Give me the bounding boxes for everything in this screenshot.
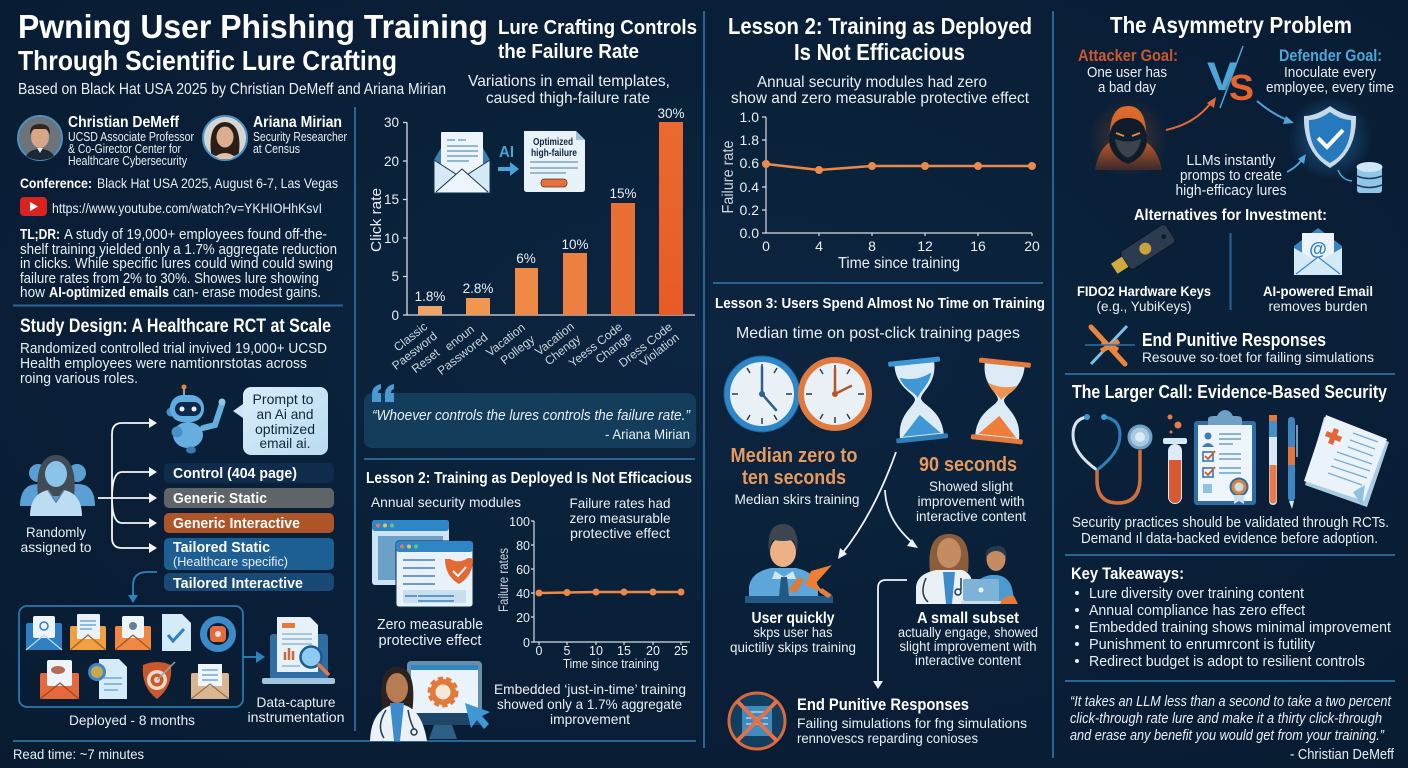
bar chart: click rate by lure: Reset: [409, 345, 443, 376]
text: annual modules: Annual security modules: [371, 494, 521, 510]
text: user quickly: quictiliy skips training: [730, 640, 856, 655]
callout: Ariana Mirian quote: [364, 384, 696, 448]
icon: hardware key: [1108, 223, 1176, 278]
line chart: failure rate over time: 1.8: [740, 132, 759, 148]
text: failure rates: zero measurable: [570, 510, 671, 526]
icon: blue clock: [724, 356, 800, 432]
text: AI powered email: [1263, 283, 1373, 314]
text: chart intro: [468, 73, 670, 107]
text: TL;DR: how: [20, 285, 45, 301]
text: randomly assigned: [20, 524, 92, 555]
icon: optimized high-failure document: high-failure: [531, 148, 577, 159]
bar chart: click rate by lure: Dress Code: [616, 319, 675, 370]
text: TL;DR: shelf training yielded only a 1.7% aggregate reduction: [20, 242, 337, 258]
callout: prompt bubble: an Ai and: [256, 406, 314, 422]
text: embedded training: [494, 681, 686, 727]
arrow: to instrumentation: [243, 651, 265, 663]
bar chart: click rate by lure: 30: [384, 115, 399, 130]
heading: alternatives: Alternatives for Investment:: [1134, 207, 1327, 224]
panel: asymmetry problem: [1077, 12, 1394, 365]
label: generic interactive arm: Generic Interactive: [173, 515, 300, 532]
text: AI powered email: AI-powered Email: [1263, 283, 1373, 299]
title: Through Scientific Lure Crafting: [18, 45, 397, 76]
icon: red mail: [40, 660, 79, 699]
text: median zero to ten seconds: Median skirs training: [734, 491, 860, 507]
text: conference: [20, 175, 338, 191]
list: takeaways: Redirect budget is adopt to resilient controls: [1089, 653, 1365, 670]
callout: Ariana Mirian quote: “Whoever controls the lures controls the failure rate.”: [372, 407, 691, 424]
text: TL;DR: in clicks. While specific lures could wind could swing: [20, 256, 333, 272]
icon: versus: S: [1229, 67, 1254, 108]
line chart: failure rate over time: Failure rate: [720, 140, 737, 214]
text: zero effect: Zero measurable: [377, 616, 483, 633]
text: LLM note: LLMs instantly: [1186, 152, 1276, 169]
heading: The Asymmetry Problem: [1110, 12, 1352, 38]
icon: clipboard: [1194, 410, 1256, 505]
panel: lesson 2 detail: [366, 470, 692, 741]
text: user quickly: skps user has: [754, 625, 833, 640]
icon: shield: [1288, 96, 1372, 180]
icon: no punishment: [729, 693, 785, 749]
text: 90 seconds: Showed slight: [929, 478, 1013, 494]
icon: Christian DeMeff portrait: [18, 116, 62, 160]
label: tailored interactive arm: Tailored Interactive: [173, 575, 303, 592]
icon: amber mail: [70, 614, 106, 650]
bar chart: click rate by lure: Paesword: [389, 329, 440, 373]
label: generic static arm: Generic Static: [173, 490, 267, 507]
icon: email: [434, 132, 490, 193]
text: intro: [731, 74, 1030, 107]
line chart: failure rates lesson 2: 40: [516, 587, 530, 601]
text: Christian DeMeff bio: [68, 114, 194, 168]
icon: blue hourglass: [888, 357, 948, 443]
bar chart: click rate by lure: [368, 106, 695, 378]
text: hardware keys: (e.g., YubiKeys): [1096, 298, 1192, 314]
bar chart: click rate by lure: Click rate: [368, 188, 385, 252]
text: Ariana Mirian bio: Ariana Mirian: [253, 114, 342, 131]
text: failure rates: Failure rates had: [570, 495, 670, 511]
text: TL;DR: [20, 227, 337, 301]
label: generic static arm: [164, 488, 334, 508]
line chart: failure rate over time: 0: [762, 238, 770, 254]
arrow: LLM to shield: [1287, 154, 1306, 172]
text: TL;DR: TL;DR:: [20, 227, 60, 243]
icon: orange mail: [115, 616, 151, 650]
text: conference: Conference:: [20, 175, 92, 191]
line chart: failure rates lesson 2: 15: [617, 644, 631, 658]
panel: speakers and summary: [18, 114, 347, 301]
panel: key takeaways: [1070, 564, 1395, 763]
text: call to action: Demand ıl data-backed evidence before adoption.: [1081, 530, 1378, 547]
line chart: failure rates lesson 2: Time since training: [563, 656, 659, 671]
panel: lesson 2 chart: [720, 13, 1040, 272]
heading: Is Not Efficacious: [794, 39, 965, 65]
text: instrumentation: [248, 694, 344, 725]
line chart: failure rate over time: 0.2: [740, 202, 759, 218]
subtitle: Based on Black Hat USA 2025 by Christian DeMeff and Ariana Mirian: [18, 81, 446, 98]
text: attacker goal: [1078, 46, 1178, 96]
callout: prompt bubble: email ai.: [260, 435, 310, 451]
bar chart: click rate by lure: 0: [391, 308, 399, 323]
text: study description: [20, 340, 327, 387]
text: deployed duration: Deployed - 8 months: [69, 712, 195, 728]
panel: lesson 3: [715, 295, 1045, 749]
bar chart: click rate by lure: 2.8%: [463, 281, 493, 296]
text: end punitive: Resouve so·toet for failing simulations: [1142, 349, 1374, 365]
label: generic interactive arm: [164, 513, 334, 533]
text: Ariana Mirian bio: at Census: [253, 142, 300, 156]
icon: crossed tools: [1085, 326, 1135, 364]
icon: orange clock: [801, 360, 869, 428]
bar chart: click rate by lure: 6%: [516, 251, 536, 266]
text: instrumentation: instrumentation: [248, 709, 344, 725]
text: chart intro: caused thigh-failure rate: [486, 90, 650, 107]
heading: [728, 13, 1032, 65]
bar chart: click rate by lure: Classic: [391, 319, 430, 354]
callout: prompt bubble: Prompt to: [252, 391, 314, 407]
line chart: failure rate over time: 8: [868, 238, 876, 254]
label: tailored static arm: [164, 538, 334, 570]
text: embedded training: improvement: [550, 711, 630, 727]
heading: Key Takeaways:: [1071, 564, 1184, 583]
panel: study design: [13, 316, 344, 762]
bar chart: click rate by lure: Chengy: [542, 332, 583, 368]
line chart: failure rate over time: Time since training: [838, 255, 960, 272]
text: AI label: AI: [499, 144, 514, 161]
text: LLM note: high-efficacy lures: [1176, 182, 1286, 199]
text: end punitive responses: [797, 695, 1027, 746]
label: tailored static arm: Tailored Static: [173, 539, 270, 556]
bar chart: click rate by lure: Passwored: [435, 330, 490, 378]
text: LLM note: [1176, 152, 1286, 199]
text: Christian DeMeff bio: Healthcare Cybersecurity: [68, 154, 188, 168]
text: embedded training: Embedded ‘just-in-time’ training: [494, 681, 686, 697]
text: user quickly: [730, 610, 856, 655]
arrow: attacker to versus: [1166, 97, 1216, 130]
icon: test tube: [1163, 414, 1187, 504]
line chart: failure rates lesson 2: 60: [516, 563, 530, 577]
line chart: failure rates lesson 2: 100: [509, 515, 530, 529]
title: [18, 8, 488, 76]
icon: beige mail: [191, 664, 229, 699]
text: TL;DR: failure rates from 2% to 30%. Showes lure showing: [20, 271, 319, 287]
line chart: failure rate over time: 20: [1024, 238, 1040, 254]
text: 90 seconds: [916, 454, 1026, 524]
bar chart: click rate by lure: enoun: [442, 322, 477, 354]
text: intro: Annual security modules had zero: [757, 74, 987, 91]
line chart: failure rates lesson 2: 80: [516, 539, 530, 553]
line chart: failure rates lesson 2: 20: [516, 611, 530, 625]
text: small subset: [898, 610, 1038, 668]
bar chart: click rate by lure: Vacation: [532, 319, 577, 358]
text: randomly assigned: assigned to: [20, 539, 92, 555]
list: takeaways: [1075, 585, 1392, 670]
title: Pwning User Phishing Training: [18, 8, 488, 45]
icon: orange hourglass: [971, 358, 1031, 444]
text: Christian DeMeff bio: & Co-Girector Center for: [68, 142, 181, 156]
icon: clinician pair with laptop: [916, 534, 1018, 604]
text: median zero to ten seconds: ten seconds: [742, 467, 846, 489]
icon: stethoscope: [1073, 414, 1151, 503]
icon: checklist doc: [162, 614, 191, 651]
text: TL;DR: A study of 19,000+ employees found off-the-: [64, 227, 327, 243]
bar chart: click rate by lure: Pollegy: [498, 332, 537, 367]
list: takeaways: Embedded training shows minimal improvement: [1089, 619, 1392, 636]
line chart: failure rates lesson 2: 5: [564, 644, 571, 658]
text: video link: https://www.youtube.com/watch?v=YKHIOHhKsvI: [52, 200, 322, 216]
icon: versus: [1207, 46, 1254, 108]
text: TL;DR: AI-optimized emails: [49, 285, 169, 301]
text: end punitive: [1142, 330, 1374, 365]
text: end punitive responses: rennovescs reparding conioses: [797, 730, 978, 746]
text: conference: Black Hat USA 2025, August 6-7, Las Vegas: [97, 175, 338, 191]
text: study description: Health employees were namtionrstotas across: [20, 355, 307, 372]
arrow: to end punitive: [873, 580, 907, 689]
label: control arm: [164, 463, 334, 483]
heading: Lure Crafting Controls: [498, 17, 697, 39]
text: defender goal: Inoculate every: [1284, 64, 1376, 81]
line chart: failure rates lesson 2: Failure rates: [496, 548, 511, 612]
text: attacker goal: One user has: [1087, 64, 1167, 81]
line chart: failure rate over time: 12: [917, 238, 933, 254]
icon: medical report: [1304, 415, 1389, 507]
list: takeaways: Annual compliance has zero effect: [1089, 602, 1306, 619]
text: user quickly: User quickly: [752, 610, 835, 627]
line chart: failure rates lesson 2: 10: [589, 644, 603, 658]
arrow: AI optimization: [498, 162, 519, 176]
icon: target: [143, 662, 175, 699]
icon: data capture laptop: [262, 617, 335, 684]
line chart: failure rate over time: 1.0: [740, 109, 759, 125]
heading: Lesson 3: Users Spend Almost No Time on Training: [715, 295, 1045, 312]
text: small subset: interactive content: [915, 653, 1021, 668]
text: Christian DeMeff bio: UCSD Associate Professor: [68, 130, 194, 144]
text: LLM note: promps to create: [1180, 167, 1282, 184]
icon: optimized high-failure document: [524, 131, 585, 192]
icon: Ariana Mirian portrait: [203, 116, 247, 160]
heading: Lesson 2: Training as Deployed: [728, 13, 1032, 39]
text: Ariana Mirian bio: [253, 114, 347, 156]
line chart: failure rates lesson 2: 0: [523, 636, 530, 650]
icon: pens: [1269, 415, 1297, 509]
text: TL;DR: can- erase modest gains.: [173, 285, 321, 301]
icon: AI email: [1294, 228, 1342, 275]
text: 90 seconds: 90 seconds: [919, 454, 1017, 476]
panel: deployed lure icons: [19, 606, 243, 707]
line chart: failure rates lesson 2: 25: [674, 644, 688, 658]
text: embedded training: showed only a 1.7% aggregate: [497, 696, 682, 712]
text: Christian DeMeff bio: Christian DeMeff: [68, 114, 180, 131]
text: zero effect: [377, 616, 483, 649]
heading: the Failure Rate: [498, 41, 639, 63]
icon: versus: V: [1207, 55, 1237, 99]
bar chart: click rate by lure: 30%: [657, 106, 685, 121]
text: median zero to ten seconds: Median zero to: [730, 445, 858, 467]
icon: doc with gear: [90, 659, 127, 699]
line chart: failure rate over time: [720, 109, 1040, 272]
text: small subset: A small subset: [917, 610, 1020, 627]
bar chart: click rate by lure: Violation: [637, 330, 682, 369]
icon: robot: [166, 384, 226, 454]
heading: Study Design: A Healthcare RCT at Scale: [20, 316, 331, 337]
bar chart: click rate by lure: Vacation: [483, 320, 528, 359]
callout: prompt bubble: [233, 387, 328, 455]
bar chart: click rate by lure: Yeess Code: [566, 319, 625, 370]
text: defender goal: employee, every time: [1266, 79, 1394, 96]
label: control arm: Control (404 page): [173, 465, 297, 482]
text: AI powered email: removes burden: [1268, 298, 1368, 314]
bar chart: click rate by lure: Change: [593, 329, 635, 366]
line chart: failure rates lesson 2: 0: [536, 644, 543, 658]
quote: Christian DeMeff: [1070, 694, 1395, 763]
line chart: failure rate over time: 0.4: [740, 179, 759, 195]
text: read time: Read time: ~7 minutes: [13, 746, 144, 762]
list: takeaways: Lure diversity over training content: [1089, 585, 1305, 602]
text: end punitive responses: Failing simulations for fng simulations: [797, 715, 1027, 731]
text: attacker goal: a bad day: [1098, 79, 1156, 96]
bar chart: click rate by lure: 5: [391, 269, 399, 284]
label: tailored static arm: (Healthcare specific): [173, 554, 288, 569]
text: instrumentation: Data-capture: [256, 694, 336, 710]
text: 90 seconds: improvement with: [918, 493, 1024, 509]
icon: hacker: [1088, 98, 1168, 178]
icon: database: [1338, 162, 1382, 193]
line chart: failure rates lesson 2: 20: [646, 644, 660, 658]
panel: lure crafting: [364, 17, 697, 448]
text: failure rates: [570, 495, 671, 541]
list: takeaways: Punishment to enrumrcont is futility: [1089, 636, 1315, 653]
heading: [498, 17, 697, 63]
text: small subset: slight improvement with: [900, 639, 1036, 654]
line chart: failure rate over time: 4: [815, 238, 823, 254]
text: call to action: [1072, 514, 1389, 547]
heading: Lesson 2: Training as Deployed Is Not Efficacious: [366, 470, 692, 487]
icon: shield badge: [204, 620, 232, 648]
text: median zero to ten seconds: [730, 445, 860, 507]
text: failure rates: protective effect: [570, 525, 670, 541]
arrows: user split: [838, 452, 918, 559]
text: subheading: Median time on post-click training pages: [736, 325, 1020, 342]
bar chart: click rate by lure: 15: [384, 192, 399, 207]
line chart: failure rate over time: 0.0: [740, 225, 759, 241]
icon: employee group: [20, 455, 95, 516]
arrow: to deployment: [128, 572, 157, 603]
bar chart: click rate by lure: 20: [384, 154, 399, 169]
text: defender goal: Defender Goal:: [1279, 46, 1382, 65]
text: hardware keys: [1077, 283, 1211, 314]
text: defender goal: [1266, 46, 1394, 96]
icon: optimized high-failure document: Optimized: [533, 137, 573, 148]
line chart: failure rates lesson 2: [496, 515, 690, 671]
text: randomly assigned: Randomly: [26, 524, 86, 540]
text: chart intro: Variations in email templates,: [468, 73, 670, 90]
panel: evidence-based security: [1072, 382, 1389, 547]
icon: YouTube: [20, 197, 47, 216]
text: Ariana Mirian bio: Security Researcher: [253, 130, 347, 144]
callout: prompt bubble: optimized: [255, 421, 315, 437]
text: study description: roing various roles.: [20, 370, 138, 387]
line chart: failure rate over time: 16: [970, 238, 986, 254]
text: attacker goal: Attacker Goal:: [1078, 46, 1178, 65]
text: small subset: actually engage, showed: [898, 625, 1038, 640]
bar chart: click rate by lure: 15%: [609, 186, 637, 201]
text: hardware keys: FIDO2 Hardware Keys: [1077, 283, 1211, 299]
icon: blue mail: [26, 616, 62, 650]
callout: Ariana Mirian quote: - Ariana Mirian: [605, 426, 690, 442]
icon: user skipping: [745, 524, 833, 603]
text: end punitive: End Punitive Responses: [1142, 330, 1326, 350]
bar chart: click rate by lure: 10%: [561, 237, 589, 252]
quote: Christian DeMeff: - Christian DeMeff: [1290, 747, 1395, 763]
line chart: failure rate over time: 0.6: [740, 155, 759, 171]
bar chart: click rate by lure: 10: [384, 231, 399, 246]
text: intro: show and zero measurable protective effect: [731, 90, 1030, 107]
icon: clinician at monitor: [370, 661, 490, 741]
arrows: randomization branches: [98, 418, 157, 553]
text: zero effect: protective effect: [378, 632, 482, 649]
icon: training windows: [372, 520, 473, 607]
text: study description: Randomized controlled trial invived 19,000+ UCSD: [20, 340, 327, 357]
text: end punitive responses: End Punitive Responses: [797, 695, 969, 714]
text: 90 seconds: interactive content: [916, 508, 1026, 524]
arrow: versus to defender: [1257, 101, 1294, 124]
icon: AI email: @: [1309, 239, 1327, 259]
bar chart: click rate by lure: 1.8%: [415, 289, 445, 304]
header: title block: [18, 8, 488, 98]
